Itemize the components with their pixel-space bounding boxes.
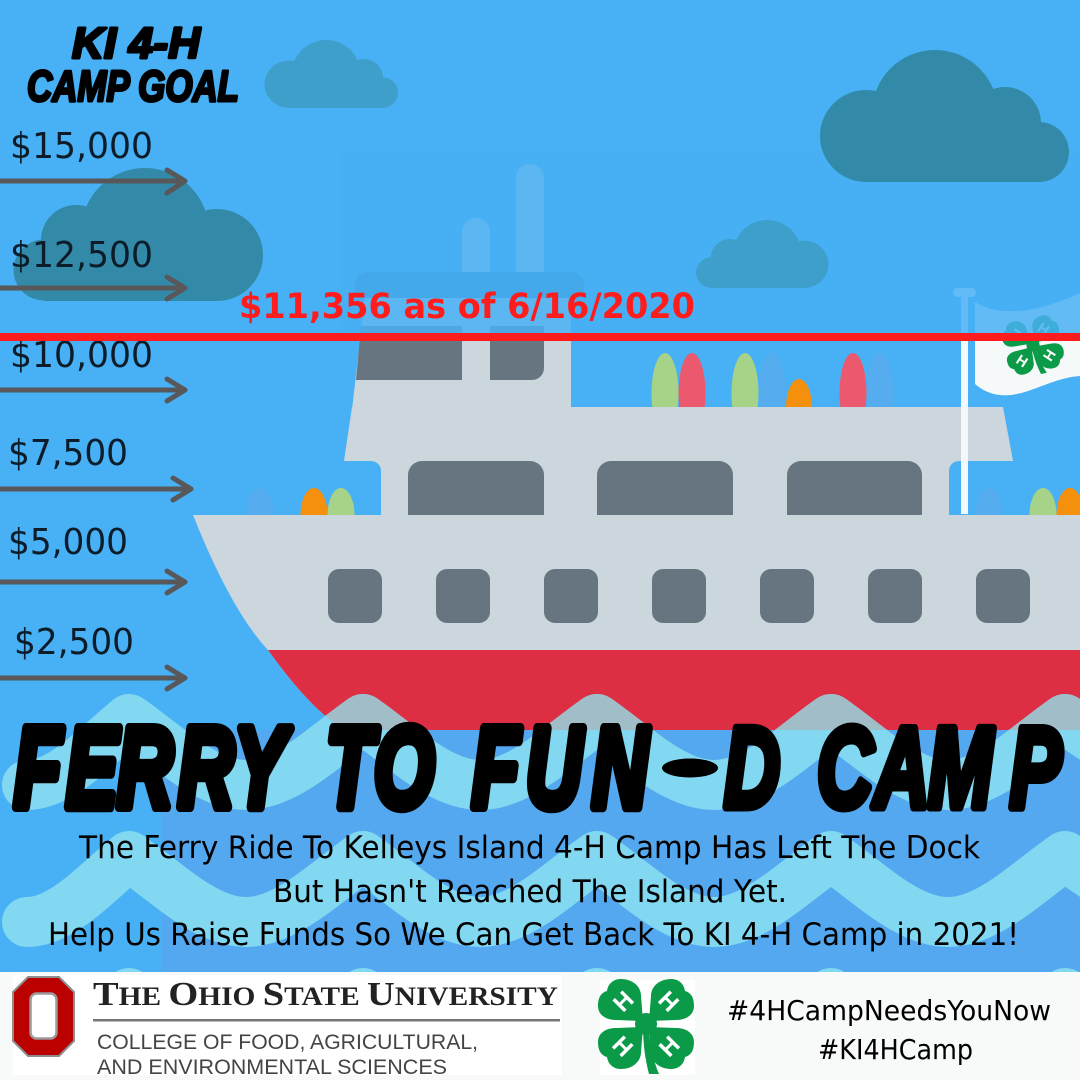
surfboards upper deck — [652, 353, 894, 435]
description text — [48, 830, 1019, 953]
main title: - — [683, 729, 696, 796]
cloud: small top — [265, 40, 398, 108]
description text: The Ferry Ride To Kelleys Island 4-H Camp Has Left The Dock — [78, 830, 980, 866]
description text: Help Us Raise Funds So We Can Get Back To KI 4-H Camp in 2021! — [48, 917, 1019, 953]
flag clover: H — [1008, 326, 1027, 344]
waves — [27, 719, 1080, 1059]
goal scale heading: CAMP GOAL — [27, 62, 239, 111]
cabin roof — [355, 272, 584, 298]
cloud: top right — [820, 50, 1069, 182]
surfboards lower deck — [246, 488, 1080, 542]
flag clover: H — [1013, 352, 1030, 371]
main title: FERRY TO FUN — [14, 704, 648, 832]
middle deck — [344, 407, 1013, 515]
4-H clover logo: H — [607, 1031, 638, 1062]
block O — [13, 977, 74, 1056]
fade above the fundraising line — [340, 150, 1080, 335]
Ohio State logo — [13, 975, 562, 1079]
waves over hull — [326, 694, 1080, 730]
flag — [975, 293, 1080, 395]
goal scale heading: KI 4-H — [72, 19, 201, 68]
hull — [193, 515, 1080, 730]
cabin windows — [356, 326, 544, 380]
flag pole — [953, 288, 976, 514]
4-H clover logo: H — [608, 986, 639, 1017]
hashtags: #4HCampNeedsYouNow — [727, 994, 1051, 1027]
main title: D CAMP — [724, 704, 1062, 832]
portholes — [328, 569, 1030, 623]
smokestacks — [462, 164, 544, 280]
hashtags — [727, 994, 1051, 1066]
flag clover: H — [1041, 347, 1060, 364]
cloud: middle — [696, 220, 828, 288]
goal amounts: $15,000 — [10, 126, 153, 167]
college name — [97, 1031, 478, 1079]
goal amounts: $5,000 — [8, 522, 128, 563]
goal arrows — [0, 170, 191, 689]
college name: COLLEGE OF FOOD, AGRICULTURAL, — [97, 1031, 478, 1054]
goal amounts — [8, 126, 153, 663]
college name: AND ENVIRONMENTAL SCIENCES — [97, 1056, 447, 1079]
4-H clover logo: H — [653, 986, 684, 1017]
goal amounts: $12,500 — [10, 235, 153, 276]
flag clover — [999, 313, 1067, 380]
red hull band — [268, 650, 1080, 730]
lower deck windows — [408, 461, 922, 515]
description text: But Hasn't Reached The Island Yet. — [273, 874, 787, 910]
darker water — [162, 730, 1080, 980]
4-H clover logo — [598, 979, 695, 1075]
hashtags: #KI4HCamp — [818, 1033, 973, 1066]
cloud: left — [14, 168, 263, 301]
university name: THE OHIO STATE UNIVERSITY — [93, 976, 558, 1013]
goal scale heading — [27, 19, 239, 111]
footer panel — [0, 972, 1080, 1080]
upper cabin — [352, 295, 571, 410]
4-H clover logo: H — [654, 1031, 685, 1062]
main title — [14, 704, 1062, 832]
ferry ship — [193, 164, 1080, 730]
flag clover: H — [1034, 320, 1052, 339]
goal amounts: $7,500 — [8, 433, 128, 474]
goal amounts: $10,000 — [10, 335, 153, 376]
goal amounts: $2,500 — [14, 622, 134, 663]
progress label: $11,356 as of 6/16/2020 — [239, 287, 695, 327]
progress line — [0, 333, 1080, 341]
